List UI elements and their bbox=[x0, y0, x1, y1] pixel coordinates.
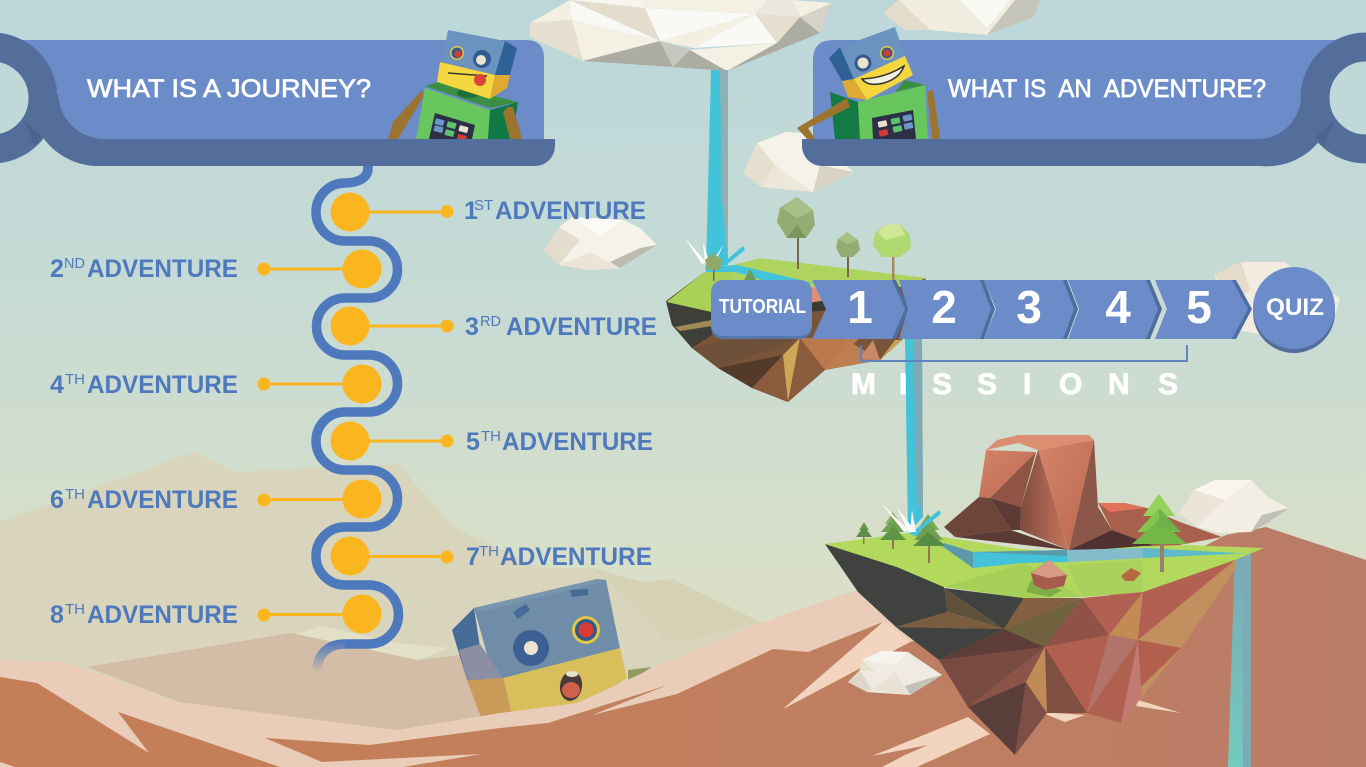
waterfall: top, from cloud bbox=[706, 70, 728, 268]
label: 8th adventure: TH bbox=[65, 601, 85, 618]
chevron step 4: 4 bbox=[1105, 281, 1131, 333]
label: 2nd adventure: ADVENTURE bbox=[87, 255, 238, 283]
floating island: large bbox=[825, 435, 1264, 755]
island river bbox=[908, 530, 1251, 568]
waypoint 2 bbox=[258, 250, 382, 288]
left robot bbox=[388, 30, 522, 139]
label: 6th adventure: ADVENTURE bbox=[87, 486, 238, 514]
label: 7th adventure: 7 bbox=[466, 543, 480, 571]
left robot keypad bbox=[429, 113, 475, 139]
island grass bbox=[825, 533, 1264, 598]
splash: small island bbox=[685, 238, 745, 266]
tutorial button: TUTORIAL bbox=[719, 296, 806, 318]
island butte bbox=[944, 435, 1222, 550]
label: 4th adventure: TH bbox=[65, 371, 85, 388]
label: 1st adventure: ST bbox=[474, 197, 493, 214]
waypoint 6 bbox=[258, 480, 382, 518]
foreground brown terrain bbox=[0, 527, 1366, 767]
boulder bbox=[1026, 560, 1067, 597]
island rock body bbox=[825, 544, 1235, 755]
right robot bbox=[797, 27, 940, 139]
missions bracket bbox=[861, 345, 1187, 361]
waypoint 5 bbox=[330, 422, 454, 460]
right robot eye bbox=[854, 54, 872, 72]
cloud: top right bbox=[883, 0, 1040, 35]
label: 7th adventure: ADVENTURE bbox=[500, 543, 652, 571]
robot eye left bbox=[513, 630, 549, 666]
right robot eye 2 bbox=[880, 46, 894, 60]
tutorial button bbox=[711, 280, 812, 339]
quiz button: QUIZ bbox=[1266, 294, 1324, 321]
cloud: behind right banner bbox=[743, 132, 854, 192]
chevron step 5 bbox=[1155, 280, 1252, 339]
tree: tiny left bbox=[705, 253, 722, 281]
waterfall: far right bbox=[1228, 552, 1251, 767]
chevron step 3: 3 bbox=[1016, 281, 1042, 333]
label: 7th adventure: TH bbox=[479, 543, 499, 560]
left robot eye 2 bbox=[473, 50, 491, 68]
robot eye right bbox=[572, 616, 600, 644]
label: 2nd adventure: 2 bbox=[50, 255, 64, 283]
small island grass bbox=[667, 258, 927, 312]
label: 5th adventure: ADVENTURE bbox=[502, 428, 653, 456]
label: 3rd adventure: 3 bbox=[465, 313, 479, 341]
banner: what is an adventure bbox=[797, 27, 1366, 166]
chevron step 4 bbox=[1068, 280, 1162, 339]
robot mouth bbox=[558, 670, 584, 702]
back mountains bbox=[0, 452, 800, 767]
right robot keypad bbox=[872, 110, 916, 139]
cloud: right bbox=[1179, 480, 1289, 533]
label: 8th adventure: 8 bbox=[50, 601, 64, 629]
tree: tiny middle bbox=[743, 269, 757, 282]
journey winding path bbox=[316, 160, 398, 672]
title right: WHAT IS AN ADVENTURE? bbox=[948, 75, 1266, 103]
label: 8th adventure: ADVENTURE bbox=[87, 601, 238, 629]
quiz button bbox=[1253, 267, 1335, 353]
banner: what is a journey bbox=[0, 30, 555, 166]
pine tree large bbox=[913, 514, 946, 563]
tree: big olive bbox=[777, 197, 815, 269]
tree: small olive bbox=[836, 232, 860, 277]
floating island: small bbox=[666, 258, 927, 402]
label: 5th adventure: 5 bbox=[466, 428, 480, 456]
label: 1st adventure: 1 bbox=[464, 197, 478, 225]
foreground peach ridge bbox=[0, 590, 1000, 767]
chevron step 2 bbox=[899, 280, 995, 339]
chevron step 2: 2 bbox=[931, 281, 957, 333]
pine tree medium bbox=[880, 512, 906, 549]
cloud: middle bbox=[544, 217, 657, 270]
chevron step 1 bbox=[812, 280, 909, 339]
chevron step 5: 5 bbox=[1186, 281, 1212, 333]
right ring bbox=[1315, 47, 1366, 149]
chevron step 3 bbox=[984, 280, 1078, 339]
label: 4th adventure: ADVENTURE bbox=[87, 371, 238, 399]
waypoint 7 bbox=[330, 536, 454, 576]
label: 3rd adventure: ADVENTURE bbox=[506, 313, 657, 341]
left robot tongue bbox=[448, 73, 487, 86]
waypoint 4 bbox=[258, 364, 382, 404]
pine tree small bbox=[856, 522, 872, 544]
cloud: top centre bbox=[530, 0, 832, 71]
label: 6th adventure: TH bbox=[65, 486, 85, 503]
waypoint 3 bbox=[330, 306, 454, 346]
left robot eye bbox=[450, 46, 464, 60]
small island rock body bbox=[666, 270, 926, 402]
rock in the notch bbox=[808, 287, 830, 312]
left ring bbox=[0, 47, 43, 149]
label: 2nd adventure: ND bbox=[64, 255, 85, 272]
small island river bbox=[705, 265, 813, 288]
label: 1st adventure: ADVENTURE bbox=[495, 197, 646, 225]
title left: WHAT IS A JOURNEY? bbox=[87, 75, 371, 103]
waterfall: middle, falling from small island bbox=[905, 339, 923, 533]
robot peeking from the ground bbox=[452, 579, 627, 720]
label: 5th adventure: TH bbox=[481, 428, 501, 445]
cloud: lower bbox=[848, 651, 942, 695]
waypoint 8 bbox=[258, 594, 382, 634]
label: 6th adventure: 6 bbox=[50, 486, 64, 514]
right robot smile bbox=[862, 66, 904, 84]
chevron step 1: 1 bbox=[847, 281, 873, 333]
missions label: MISSIONS bbox=[851, 368, 1178, 401]
waypoint 1 bbox=[330, 192, 454, 232]
splash: large island bbox=[881, 503, 941, 533]
label: 3rd adventure: RD bbox=[480, 313, 501, 330]
cloud: behind quiz bbox=[1214, 262, 1340, 340]
tree: bright bbox=[873, 224, 911, 285]
pine tree bright bbox=[1132, 494, 1187, 572]
small boulder bbox=[1121, 568, 1141, 581]
label: 4th adventure: 4 bbox=[50, 371, 64, 399]
